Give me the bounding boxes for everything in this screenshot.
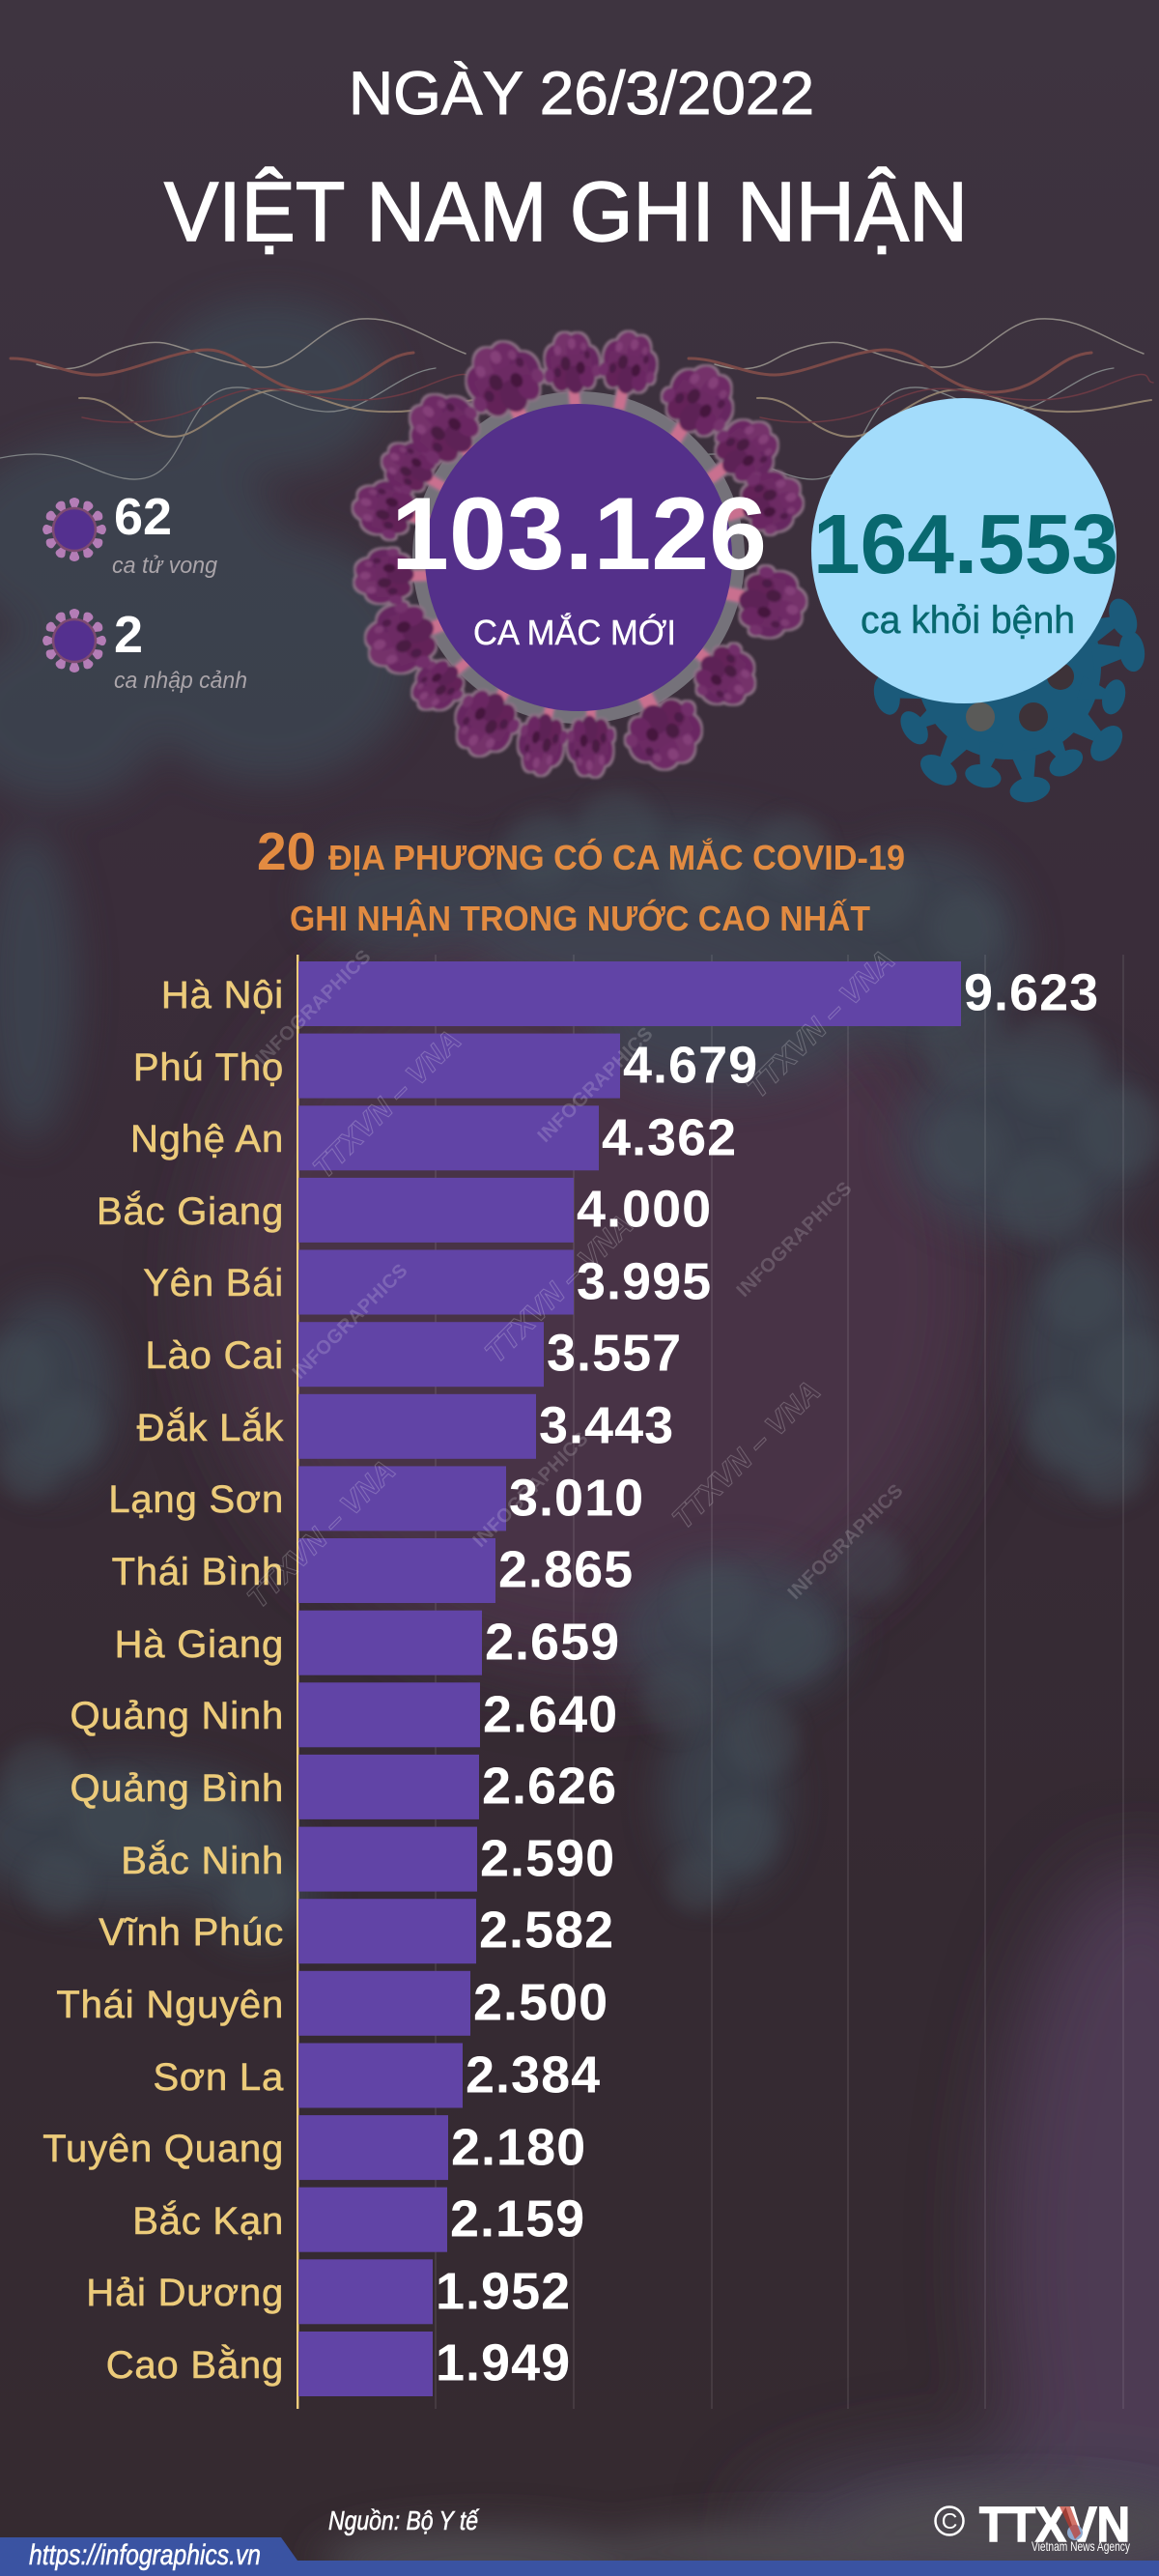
row: Vĩnh Phúc	[99, 1899, 614, 1963]
bar chart	[42, 955, 1123, 2409]
row: Đắk Lắk: Đắk Lắk	[137, 1406, 284, 1449]
row: Thái Bình: 2.865	[498, 1540, 634, 1598]
stat: imported cases	[42, 606, 247, 694]
row: Hải Dương: Hải Dương	[86, 2272, 284, 2314]
new cases number: 103.126	[391, 475, 767, 591]
watermarks: TTXVN – VNA	[306, 1023, 467, 1185]
row: Bắc Ninh: 2.590	[480, 1830, 615, 1888]
row: Hà Nội: Hà Nội	[161, 974, 284, 1016]
row: Quảng Bình	[70, 1755, 617, 1819]
decorative wave lines right	[678, 319, 1153, 479]
row: Cao Bằng	[106, 2332, 571, 2396]
source: Nguồn: Bộ Y tế	[328, 2505, 480, 2535]
chart heading: 20	[257, 821, 316, 881]
watermarks: INFOGRAPHICS	[733, 1178, 857, 1302]
row: Yên Bái	[143, 1250, 712, 1314]
title: main heading: VIỆT NAM GHI NHẬN	[164, 165, 968, 259]
row: Thái Nguyên: 2.500	[473, 1973, 608, 2031]
icon: blue virus behind recovered circle	[870, 574, 1147, 805]
row: Sơn La: 2.384	[466, 2046, 601, 2104]
row: Bắc Giang: Bắc Giang	[97, 1189, 284, 1233]
row: Đắk Lắk	[137, 1394, 674, 1459]
row: Nghệ An: Nghệ An	[130, 1118, 284, 1160]
chart heading: ĐỊA PHƯƠNG CÓ CA MẮC COVID-19	[328, 837, 905, 877]
row: Bắc Giang: 4.000	[577, 1181, 712, 1239]
row: Đắk Lắk: 3.443	[539, 1397, 674, 1455]
row: Quảng Ninh	[71, 1682, 618, 1747]
watermarks: INFOGRAPHICS	[289, 1260, 412, 1384]
chart heading: GHI NHẬN TRONG NƯỚC CAO NHẤT	[290, 898, 870, 938]
icon: large magenta coronavirus	[348, 328, 812, 782]
recovered circle	[811, 398, 1118, 703]
row: Thái Nguyên	[56, 1971, 608, 2036]
logo: TTXVN: TTXVN	[979, 2497, 1130, 2552]
row: Sơn La: Sơn La	[153, 2056, 284, 2099]
row: Thái Bình: Thái Bình	[112, 1551, 284, 1593]
row: Quảng Bình: Quảng Bình	[70, 1767, 284, 1810]
recovered label: ca khỏi bệnh	[861, 599, 1075, 642]
icon: small virus imported	[42, 609, 106, 673]
row: Hà Nội	[161, 961, 1099, 1026]
new cases label: CA MẮC MỚI	[473, 612, 676, 652]
row: Bắc Kạn: Bắc Kạn	[132, 2199, 284, 2243]
row: Thái Nguyên: Thái Nguyên	[56, 1984, 284, 2026]
row: Hải Dương: 1.952	[436, 2263, 571, 2321]
row: Phú Thọ: Phú Thọ	[133, 1046, 284, 1089]
row: Bắc Giang	[97, 1178, 712, 1243]
decorative wave lines left	[0, 319, 475, 479]
row: Hà Giang: Hà Giang	[115, 1623, 284, 1666]
watermarks: TTXVN – VNA	[478, 1208, 639, 1369]
imported label: ca nhập cảnh	[114, 668, 247, 694]
deaths label: ca tử vong	[112, 553, 218, 579]
row: Hải Dương	[86, 2259, 571, 2324]
row: Bắc Kạn: 2.159	[450, 2190, 585, 2247]
logo: TTXVN: C	[942, 2508, 957, 2533]
row: Tuyên Quang	[42, 2115, 586, 2180]
row: Lào Cai	[146, 1322, 682, 1387]
row: Thái Bình	[112, 1538, 634, 1603]
watermarks: INFOGRAPHICS	[469, 1428, 593, 1552]
recovered number: 164.553	[813, 498, 1118, 591]
row: Vĩnh Phúc: Vĩnh Phúc	[99, 1911, 284, 1954]
new cases circle	[391, 404, 767, 711]
stat: deaths	[42, 488, 218, 579]
chart heading	[257, 821, 905, 938]
watermarks: TTXVN – VNA	[665, 1374, 827, 1535]
row: Vĩnh Phúc: 2.582	[479, 1902, 614, 1960]
row: Nghệ An: 4.362	[602, 1109, 737, 1167]
row: Lạng Sơn: Lạng Sơn	[108, 1478, 284, 1521]
row: Lạng Sơn	[108, 1466, 644, 1531]
row: Bắc Ninh	[121, 1827, 615, 1892]
watermarks	[240, 943, 908, 1615]
row: Quảng Bình: 2.626	[482, 1757, 617, 1815]
deaths number: 62	[114, 488, 172, 546]
row: Tuyên Quang: 2.180	[451, 2118, 586, 2176]
website url: https://infographics.vn	[29, 2539, 261, 2571]
row: Nghệ An	[130, 1105, 737, 1170]
row: Quảng Ninh: 2.640	[483, 1685, 618, 1743]
row: Lào Cai: Lào Cai	[146, 1334, 284, 1377]
row: Tuyên Quang: Tuyên Quang	[42, 2128, 284, 2170]
row: Phú Thọ	[133, 1034, 758, 1099]
row: Bắc Kạn	[132, 2188, 585, 2252]
watermarks: INFOGRAPHICS	[252, 946, 376, 1070]
watermarks: TTXVN – VNA	[740, 943, 901, 1104]
watermarks: TTXVN – VNA	[240, 1453, 402, 1615]
row: Yên Bái: Yên Bái	[143, 1262, 284, 1304]
row: Bắc Ninh: Bắc Ninh	[121, 1839, 284, 1882]
row: Hà Giang	[115, 1611, 620, 1675]
row: Quảng Ninh: Quảng Ninh	[71, 1695, 284, 1737]
row: Phú Thọ: 4.679	[623, 1036, 758, 1094]
row: Cao Bằng: 1.949	[436, 2334, 571, 2392]
footer bar	[0, 2537, 1159, 2576]
title: date: NGÀY 26/3/2022	[349, 60, 814, 128]
row: Hà Nội: 9.623	[964, 964, 1099, 1022]
row: Yên Bái: 3.995	[577, 1252, 712, 1310]
icon: small virus deaths	[42, 498, 106, 561]
watermarks: INFOGRAPHICS	[784, 1480, 908, 1604]
row: Sơn La	[153, 2043, 601, 2108]
row: Cao Bằng: Cao Bằng	[106, 2343, 284, 2387]
row: Hà Giang: 2.659	[485, 1614, 620, 1672]
row: Lạng Sơn: 3.010	[509, 1469, 644, 1527]
imported number: 2	[114, 606, 143, 664]
row: Lào Cai: 3.557	[547, 1324, 682, 1382]
watermarks: INFOGRAPHICS	[534, 1023, 658, 1147]
